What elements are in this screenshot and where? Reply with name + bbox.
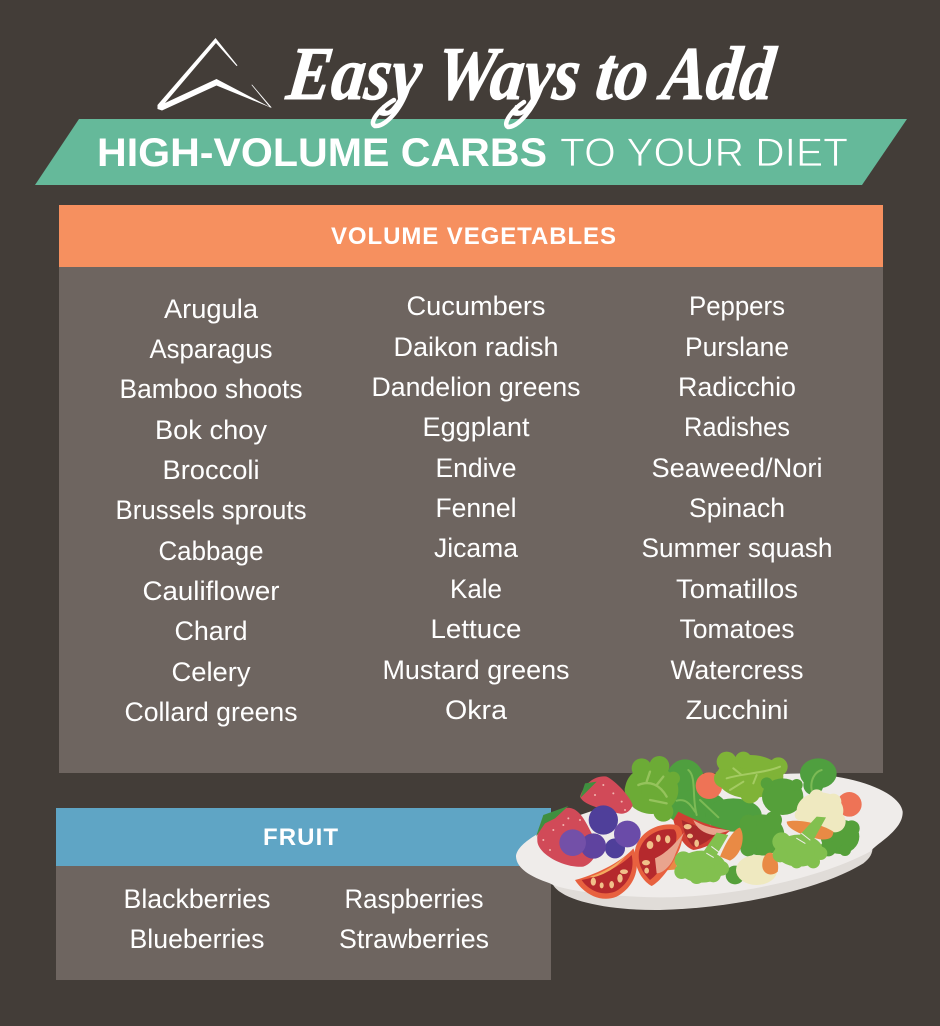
vegetable list: column 1: [116, 294, 306, 727]
vegetable list: column 3: Summer squash: [642, 533, 832, 563]
broccoli and cauliflower foreground: [674, 817, 827, 885]
vegetable list: column 1: Bok choy: [155, 415, 268, 445]
vegetable list: column 1: Celery: [172, 657, 251, 687]
fruit list: Blackberries: [124, 884, 270, 914]
vegetable list: column 3: Purslane: [685, 332, 789, 362]
subtitle bold: high-volume carbs: HIGH-VOLUME CARBS: [97, 131, 547, 175]
vegetable list: column 3: Spinach: [689, 493, 785, 523]
header: fruit: [56, 808, 551, 866]
plate: [516, 773, 903, 910]
strawberries: [536, 776, 633, 867]
panel: volume vegetables: [59, 205, 883, 773]
vegetable list: column 2: Lettuce: [430, 614, 522, 644]
fruit list: [124, 884, 489, 954]
icon: mountain logo: [158, 38, 272, 110]
vegetable list: column 3: Seaweed/Nori: [652, 453, 822, 483]
vegetable list: column 3: Watercress: [670, 655, 804, 685]
vegetable list: column 3: Peppers: [689, 291, 785, 321]
fruit list: Strawberries: [339, 924, 489, 954]
vegetable list: column 1: Broccoli: [162, 455, 260, 485]
header: fruit: FRUIT: [263, 824, 338, 851]
header: volume vegetables: VOLUME VEGETABLES: [331, 223, 616, 250]
vegetable list: column 1: Asparagus: [150, 334, 272, 364]
vegetable list: column 3: Zucchini: [686, 695, 788, 725]
vegetable list: column 2: Okra: [445, 695, 508, 725]
vegetable list: column 1: Bamboo shoots: [120, 374, 302, 404]
vegetable list: column 2: Eggplant: [422, 412, 530, 442]
vegetable list: column 2: [372, 291, 580, 725]
green lettuce and broccoli background: [625, 752, 862, 856]
panel: fruit: [56, 808, 551, 980]
vegetable list: column 1: Collard greens: [124, 697, 298, 727]
vegetable list: column 3: Radishes: [684, 412, 790, 442]
vegetable list: column 1: Brussels sprouts: [116, 495, 306, 525]
vegetable list: column 2: Kale: [450, 574, 502, 604]
vegetable list: column 2: Cucumbers: [406, 291, 546, 321]
carrots: [663, 821, 833, 871]
fruit list: Raspberries: [344, 884, 484, 914]
vegetable list: column 2: Endive: [436, 453, 516, 483]
header: volume vegetables: [59, 205, 883, 267]
tomato wedges: [575, 812, 730, 899]
title: easy ways to add: Easy Ways to Add: [282, 31, 781, 116]
vegetable list: column 3: Tomatoes: [680, 614, 794, 644]
vegetable list: column 2: Daikon radish: [394, 332, 558, 362]
vegetable list: column 2: Mustard greens: [382, 655, 570, 685]
vegetable list: column 1: Arugula: [164, 294, 259, 324]
vegetable list: column 2: Jicama: [434, 533, 519, 563]
banner: subtitle ribbon: [35, 119, 907, 185]
fruit list: Blueberries: [130, 924, 264, 954]
vegetable list: column 1: Cabbage: [158, 536, 264, 566]
vegetable list: column 2: Dandelion greens: [372, 372, 580, 402]
vegetable list: column 1: Cauliflower: [142, 576, 280, 606]
vegetable list: column 1: Chard: [174, 616, 248, 646]
illustration: salad plate: [516, 752, 903, 910]
subtitle light: to your diet: TO YOUR DIET: [560, 131, 848, 175]
blueberries: [559, 805, 641, 859]
vegetable list: column 3: [642, 291, 832, 725]
vegetable list: column 3: Radicchio: [678, 372, 796, 402]
vegetable list: column 3: Tomatillos: [676, 574, 798, 604]
vegetable list: column 2: Fennel: [436, 493, 516, 523]
